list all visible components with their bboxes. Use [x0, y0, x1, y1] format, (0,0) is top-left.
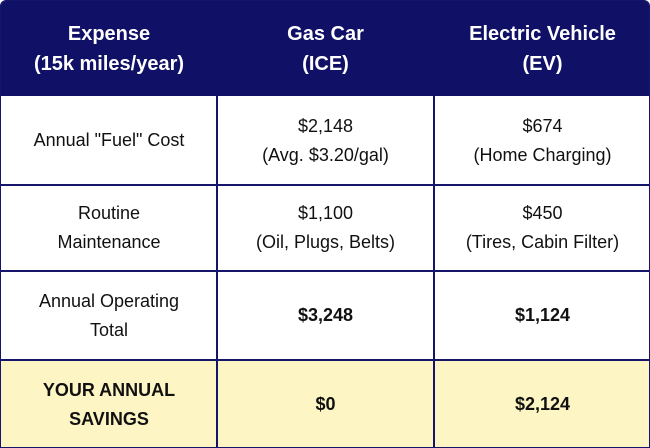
row: fuel EV: (Home Charging): [473, 144, 612, 164]
row: maintenance gas: [256, 203, 395, 252]
row: total label: [39, 290, 179, 340]
header: gas car: Gas Car: [287, 22, 364, 44]
row: savings gas: [217, 360, 434, 448]
row: savings label: [1, 360, 217, 448]
row: maintenance EV: [466, 203, 619, 252]
header: expense: (15k miles/year): [34, 52, 184, 74]
row: maintenance EV: $450: [522, 203, 563, 223]
row: savings gas: $0: [315, 394, 336, 414]
row: savings label: SAVINGS: [69, 408, 149, 428]
row: savings EV: $2,124: [515, 394, 570, 414]
header: expense: [1, 1, 217, 96]
row: maintenance gas: (Oil, Plugs, Belts): [256, 232, 395, 252]
row: fuel gas: $2,148: [298, 116, 353, 136]
row: maintenance EV: (Tires, Cabin Filter): [466, 232, 619, 252]
header: expense: Expense: [68, 22, 150, 44]
row: maintenance label: Routine: [78, 203, 140, 223]
row: fuel EV: [473, 116, 612, 165]
row: total label: Total: [90, 320, 128, 340]
row: maintenance label: Maintenance: [57, 232, 161, 252]
row: total EV: $1,124: [515, 305, 570, 325]
row: maintenance label: [57, 203, 161, 252]
row: savings label: YOUR ANNUAL: [43, 380, 175, 400]
header row: [1, 1, 650, 96]
header: EV: (EV): [522, 52, 562, 74]
row: fuel label: Annual "Fuel" Cost: [34, 130, 184, 150]
row: fuel gas: [262, 116, 389, 165]
header: gas car: [217, 1, 434, 96]
header: gas car: (ICE): [302, 52, 349, 74]
row: savings EV: [434, 360, 650, 448]
row: fuel EV: $674: [522, 116, 563, 136]
row: total gas: $3,248: [298, 305, 353, 325]
row: total label: Annual Operating: [39, 290, 179, 310]
header: EV: Electric Vehicle: [469, 22, 616, 44]
row: maintenance gas: $1,100: [298, 203, 353, 223]
header: EV: [434, 1, 650, 96]
row: fuel gas: (Avg. $3.20/gal): [262, 144, 389, 164]
